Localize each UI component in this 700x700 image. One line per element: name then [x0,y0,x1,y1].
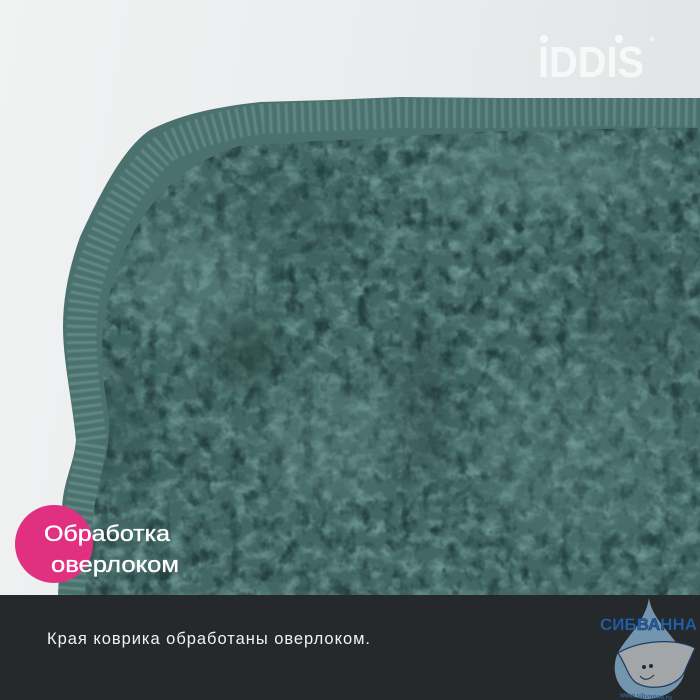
mat overlock edge band [40,85,700,600]
Sibvanna logo [600,598,697,700]
logo wordmark: СИБВАННА [600,615,697,634]
badge label [44,521,179,577]
logo water drop [615,598,685,699]
logo tub face [640,664,654,679]
badge label line 1: Обработка [44,521,171,546]
pink badge circle [15,505,93,583]
bath mat photo [40,85,700,600]
badge label line 2: оверлоком [51,552,179,577]
IDDIS brand logo: IDDIS [538,38,644,87]
logo bathtub [618,642,695,687]
caption text: Края коврика обработаны оверлоком. [47,630,370,648]
dark caption bar [0,595,700,700]
mat shag pile [60,120,700,600]
